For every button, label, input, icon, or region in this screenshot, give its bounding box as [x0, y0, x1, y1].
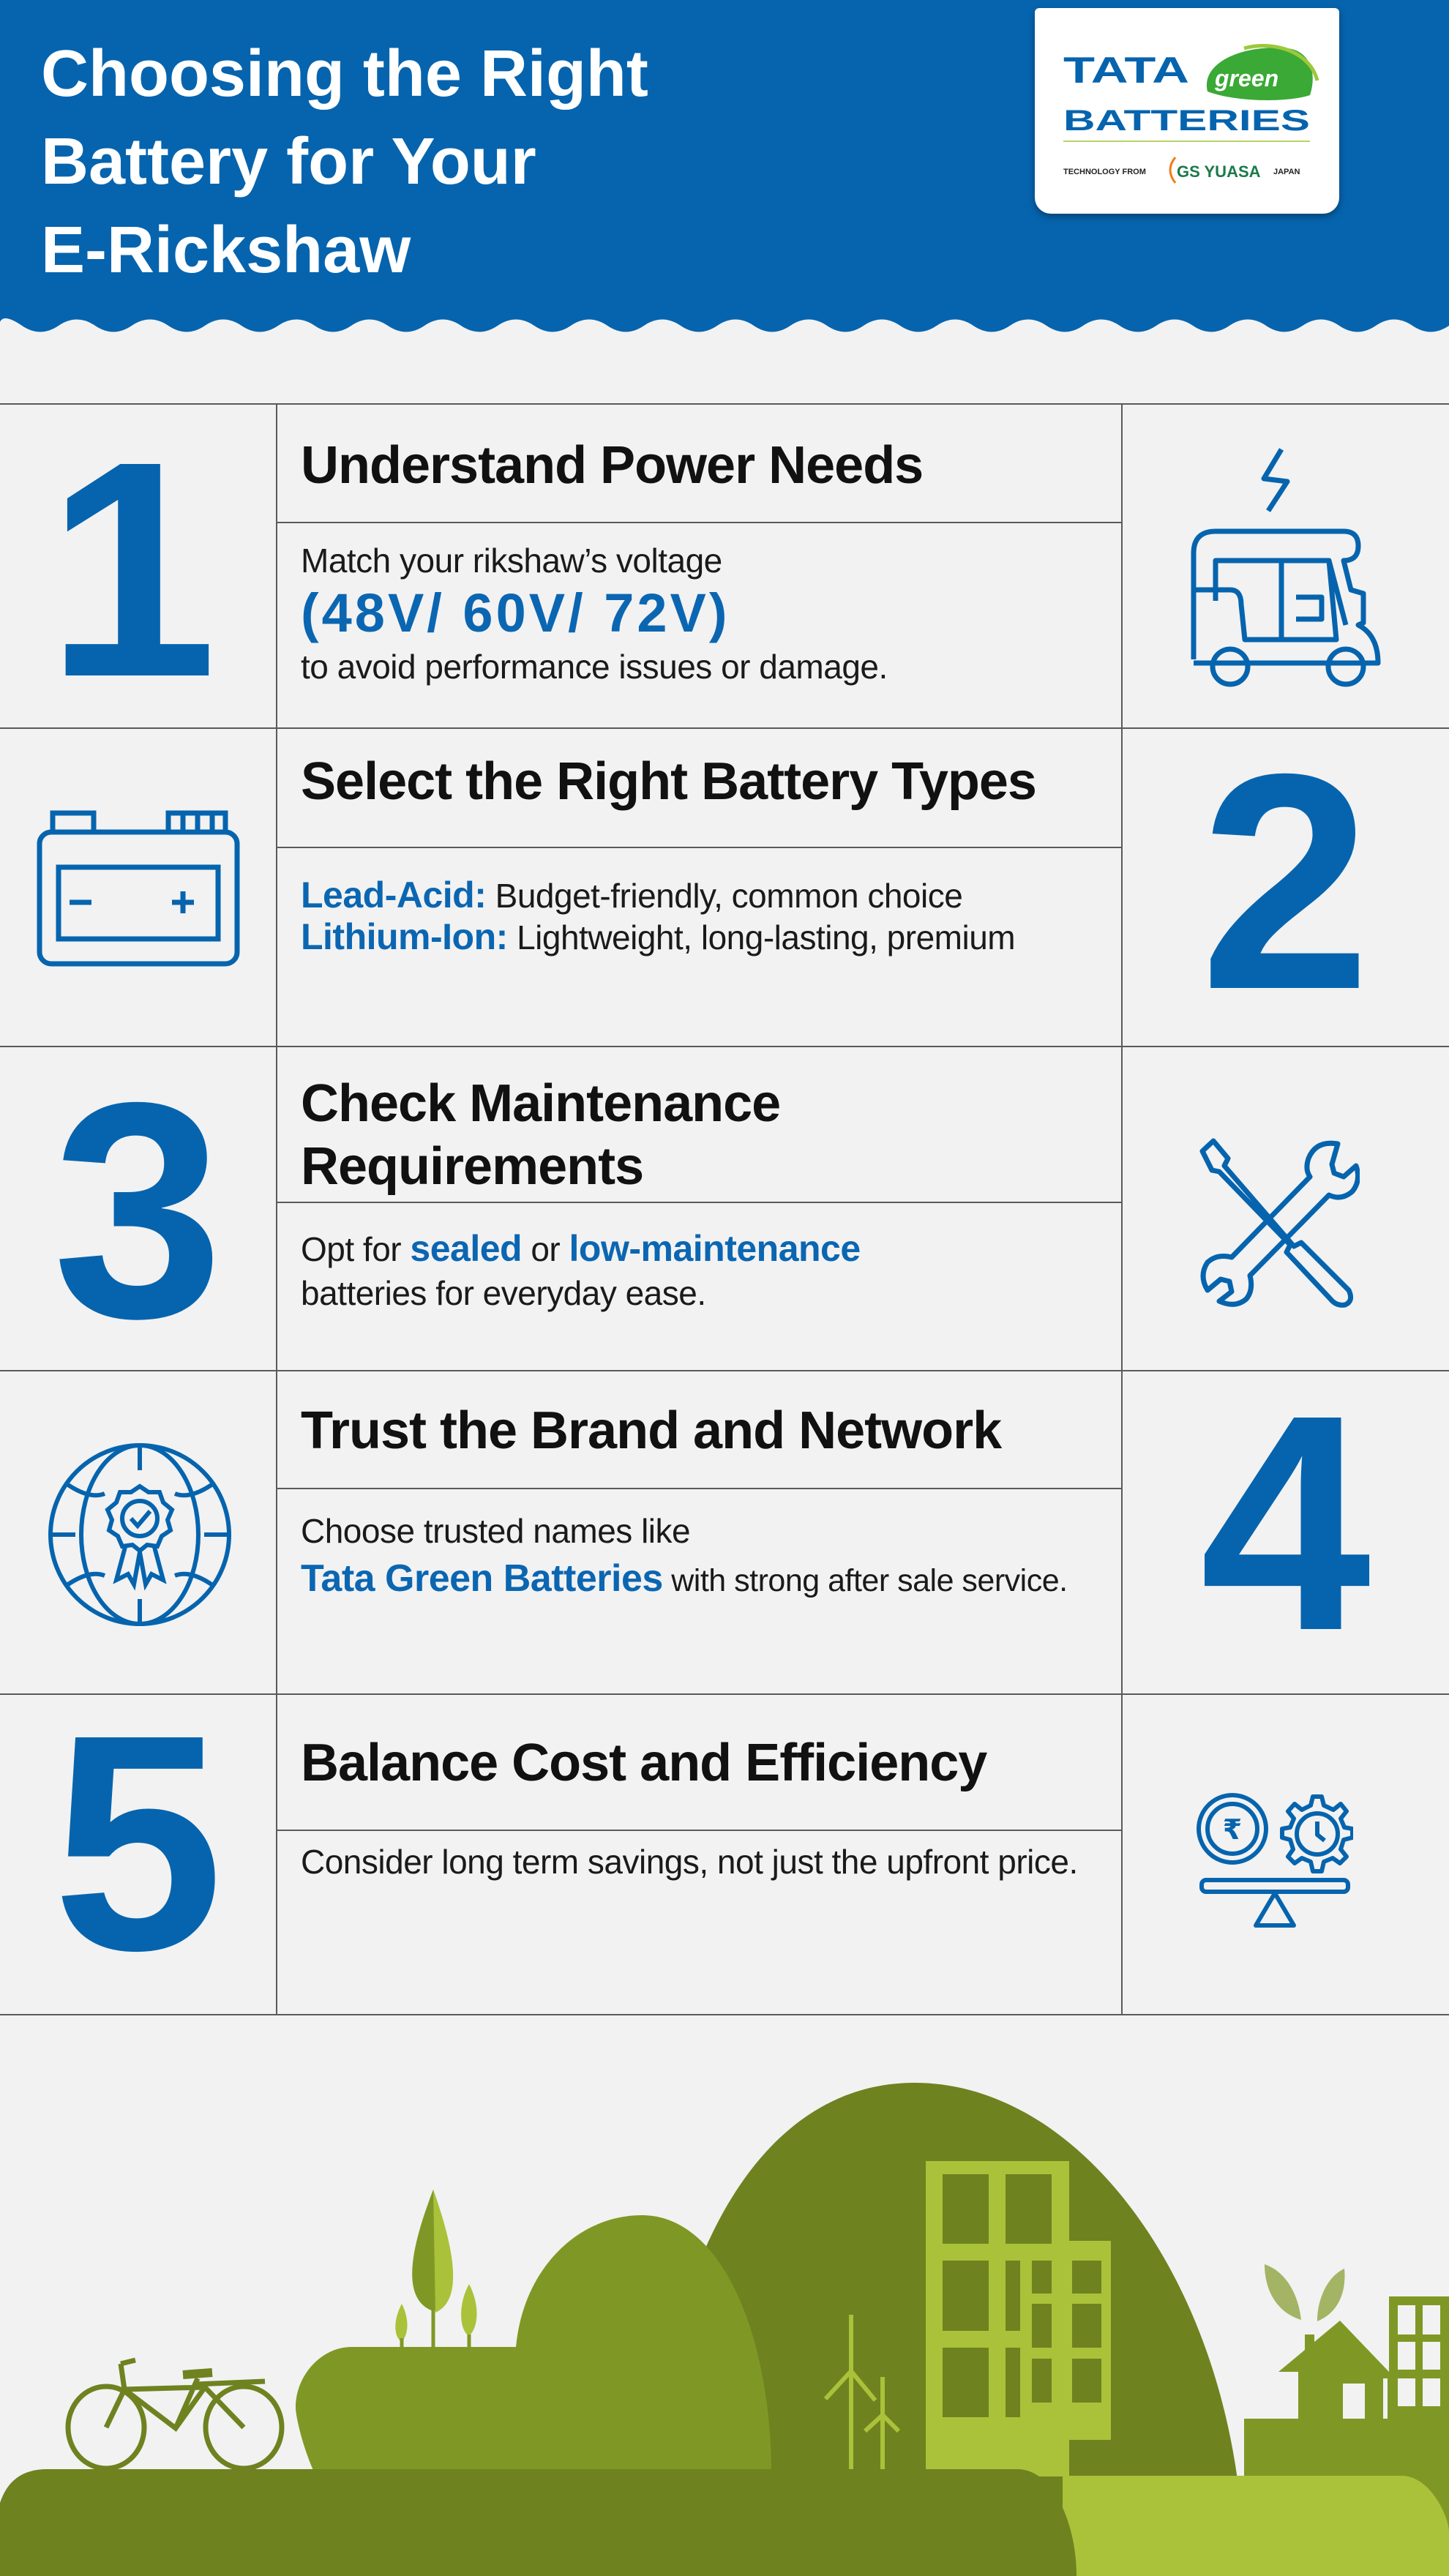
row 1 body: (48V/ 60V/ 72V): [301, 583, 730, 643]
landscape illustration: [0, 2083, 1449, 2576]
row 3 body: Opt for sealed or low-maintenance: [301, 1228, 861, 1269]
title: Choosing the Right: [41, 37, 648, 111]
buildings: [926, 2161, 1111, 2476]
row 1 heading: Understand Power Needs: [301, 436, 923, 495]
row 4 heading: Trust the Brand and Network: [301, 1401, 1001, 1460]
logo card: JAPAN: [1273, 168, 1300, 176]
big dome: [647, 2083, 1244, 2576]
row 3 body: [301, 1228, 861, 1312]
title: Battery for Your: [41, 125, 536, 198]
row 2 heading: Select the Right Battery Types: [301, 752, 1036, 811]
row 1 body: to avoid performance issues or damage.: [301, 648, 888, 686]
row 3 body: batteries for everyday ease.: [301, 1274, 706, 1312]
row 4 body: Tata Green Batteries with strong after sale service.: [301, 1557, 1068, 1600]
row 5 number: 5: [53, 1671, 223, 2015]
row 4 icon: globe badge: [48, 1443, 231, 1626]
row 3 heading: [301, 1074, 780, 1196]
row 3 heading: Check Maintenance: [301, 1074, 780, 1133]
logo card: [1035, 8, 1339, 214]
light ground: [1063, 2476, 1449, 2576]
icon: tools: [1199, 1139, 1360, 1308]
row 2 body: [301, 875, 1015, 957]
dark ground band: [0, 2469, 1077, 2576]
row 2 body: Lithium-Ion: Lightweight, long-lasting, premium: [301, 916, 1015, 957]
medium hill with trees: [296, 2190, 771, 2474]
icon: balance scale: ₹: [1223, 1815, 1242, 1846]
table grid lines: [0, 403, 1449, 2015]
row 5 heading: Balance Cost and Efficiency: [301, 1734, 986, 1792]
title: E-Rickshaw: [41, 214, 411, 287]
row 3 heading: Requirements: [301, 1137, 643, 1196]
logo card: BATTERIES: [1063, 105, 1310, 137]
bicycle: [68, 2360, 282, 2468]
header background: [0, 0, 1449, 332]
row 1 body: Match your rikshaw’s voltage: [301, 542, 722, 580]
right houses: [1244, 2264, 1449, 2576]
logo card: TECHNOLOGY FROM: [1063, 168, 1146, 176]
row 4 number: 4: [1200, 1352, 1371, 1695]
title: [41, 37, 648, 287]
logo card: green: [1214, 65, 1278, 91]
logo card: TATA: [1063, 50, 1189, 91]
wind turbines: [825, 2315, 899, 2474]
row 4 body: [301, 1512, 1068, 1600]
row 1 body: [301, 542, 888, 686]
row 4 body: Choose trusted names like: [301, 1512, 690, 1550]
row 2 icon: battery: [37, 811, 240, 966]
row 1 number: 1: [46, 398, 217, 741]
icon: e-rickshaw: [1191, 448, 1380, 686]
icon: balance scale: [1197, 1793, 1353, 1928]
logo card: GS YUASA: [1177, 162, 1261, 181]
row 5 body: Consider long term savings, not just the upfront price.: [301, 1843, 1078, 1881]
row 2 number: 2: [1200, 711, 1371, 1054]
row 3 number: 3: [53, 1039, 223, 1382]
row 2 body: Lead-Acid: Budget-friendly, common choice: [301, 875, 962, 916]
